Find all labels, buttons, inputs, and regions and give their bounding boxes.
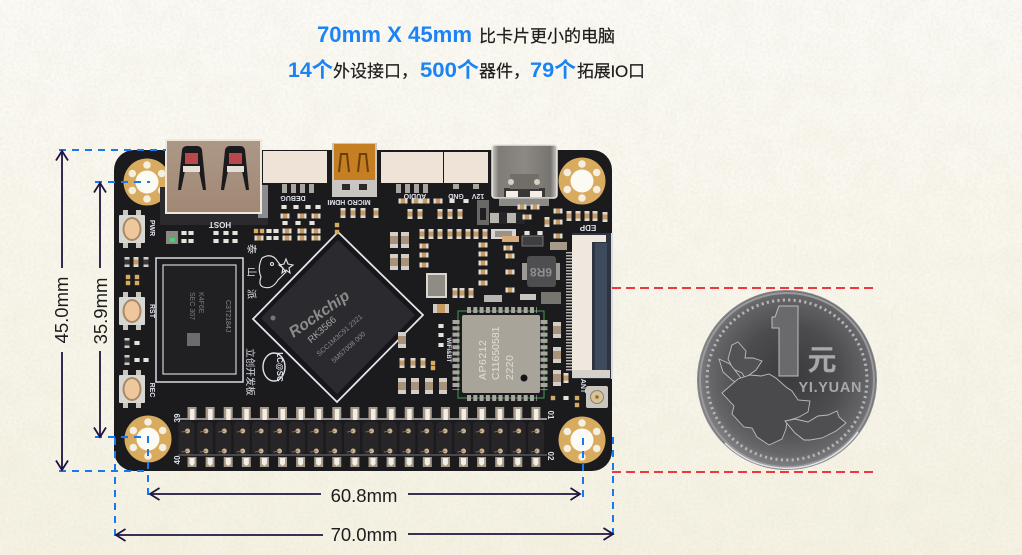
RK3566 processor: 5M57008 000 [331, 331, 367, 365]
LCSC logo [263, 352, 285, 382]
coin numeral 1 [772, 306, 798, 376]
micro HDMI port [332, 143, 377, 197]
silkscreen labels: ANT [579, 379, 586, 394]
heading: component counts line: 拓展IO口 [577, 62, 645, 81]
silkscreen labels: 派 [245, 289, 257, 299]
RAM chip: C3T2184J [224, 300, 231, 332]
RK3566 processor [253, 232, 423, 402]
silkscreen labels: 12V [471, 192, 484, 199]
crystal [426, 273, 447, 298]
silkscreen labels [148, 192, 596, 464]
WiFi module AP6212: C11650581 [490, 326, 502, 380]
heading: component counts line [288, 59, 645, 82]
silkscreen labels: 山 [245, 267, 257, 277]
silkscreen labels: 39 [173, 413, 182, 422]
silkscreen labels: 02 [546, 452, 555, 461]
RAM chip: SEC 307 [188, 292, 195, 320]
board body [114, 150, 612, 471]
silkscreen labels: MICRO HDMI [327, 198, 371, 205]
silkscreen labels: HOST [209, 220, 231, 229]
RK3566 processor: Rockchip [286, 287, 353, 341]
power inductor [522, 256, 560, 287]
coin character: 元 [807, 345, 837, 377]
heading: component counts line: 外设接口， [333, 62, 418, 81]
heading: component counts line: 500个 [420, 59, 479, 82]
power inductor: 6R8 [530, 265, 552, 279]
silkscreen labels: GND [448, 192, 464, 199]
dashed guide lines: blue board extents [59, 150, 613, 537]
mascot logo [259, 256, 293, 288]
heading: component counts line: 14个 [288, 59, 333, 82]
silkscreen labels: DEBUG [280, 194, 306, 201]
RAM chip [156, 258, 243, 382]
WiFi module AP6212: 2220 [504, 355, 516, 380]
heading: size line: 70mm X 45mm [317, 22, 472, 47]
dimension: 35.9mm hole spacing: 35.9mm [90, 278, 111, 344]
EDP FPC connector [569, 233, 613, 379]
silkscreen labels: EDP [579, 223, 596, 232]
heading: size line [317, 22, 615, 47]
LCSC logo: LC@SC [275, 352, 284, 382]
silkscreen labels: REC [148, 383, 155, 397]
WiFi module AP6212 [456, 310, 544, 398]
silkscreen labels: 泰 [245, 244, 258, 254]
mounting holes [124, 158, 606, 464]
audio connector [381, 152, 443, 193]
WiFi module AP6212: AP6212 [477, 340, 489, 380]
debug connector [263, 151, 327, 193]
silkscreen labels: WiFi&BT [445, 338, 451, 363]
RK3566 processor: RK3566 [306, 315, 339, 346]
dashed guide lines: red coin height [612, 288, 878, 472]
USB-C port [492, 145, 557, 206]
silkscreen labels: AUDIO [403, 192, 426, 199]
RK3566 processor: SCC1M3C91 2321 [316, 314, 364, 358]
heading: component counts line: 79个 [530, 59, 576, 82]
silkscreen labels: PWR [148, 220, 155, 236]
dimension: 60.8mm hole spacing: 60.8mm [331, 485, 397, 506]
heading: component counts line: 器件， [479, 62, 530, 81]
silkscreen labels: RST [148, 304, 155, 319]
silkscreen labels: 40 [173, 455, 182, 464]
heading: size line: 比卡片更小的电脑 [479, 27, 615, 46]
silkscreen labels: 立创开发板 [244, 348, 256, 396]
coin inscription: YI.YUAN [798, 380, 862, 396]
12V connector [444, 152, 488, 189]
USB host port [160, 140, 268, 225]
dimension: 70.0mm width: 70.0mm [331, 524, 397, 545]
circuit board photo [114, 140, 613, 471]
push buttons [119, 210, 145, 408]
dimension: 45.0mm height: 45.0mm [51, 277, 72, 343]
silkscreen labels: 01 [546, 411, 555, 420]
pin header [178, 407, 547, 467]
coin peony [719, 342, 846, 445]
RAM chip: K4F6E [197, 292, 204, 314]
one yuan coin [698, 290, 876, 470]
SMD components [124, 198, 608, 407]
antenna connector [586, 386, 608, 408]
